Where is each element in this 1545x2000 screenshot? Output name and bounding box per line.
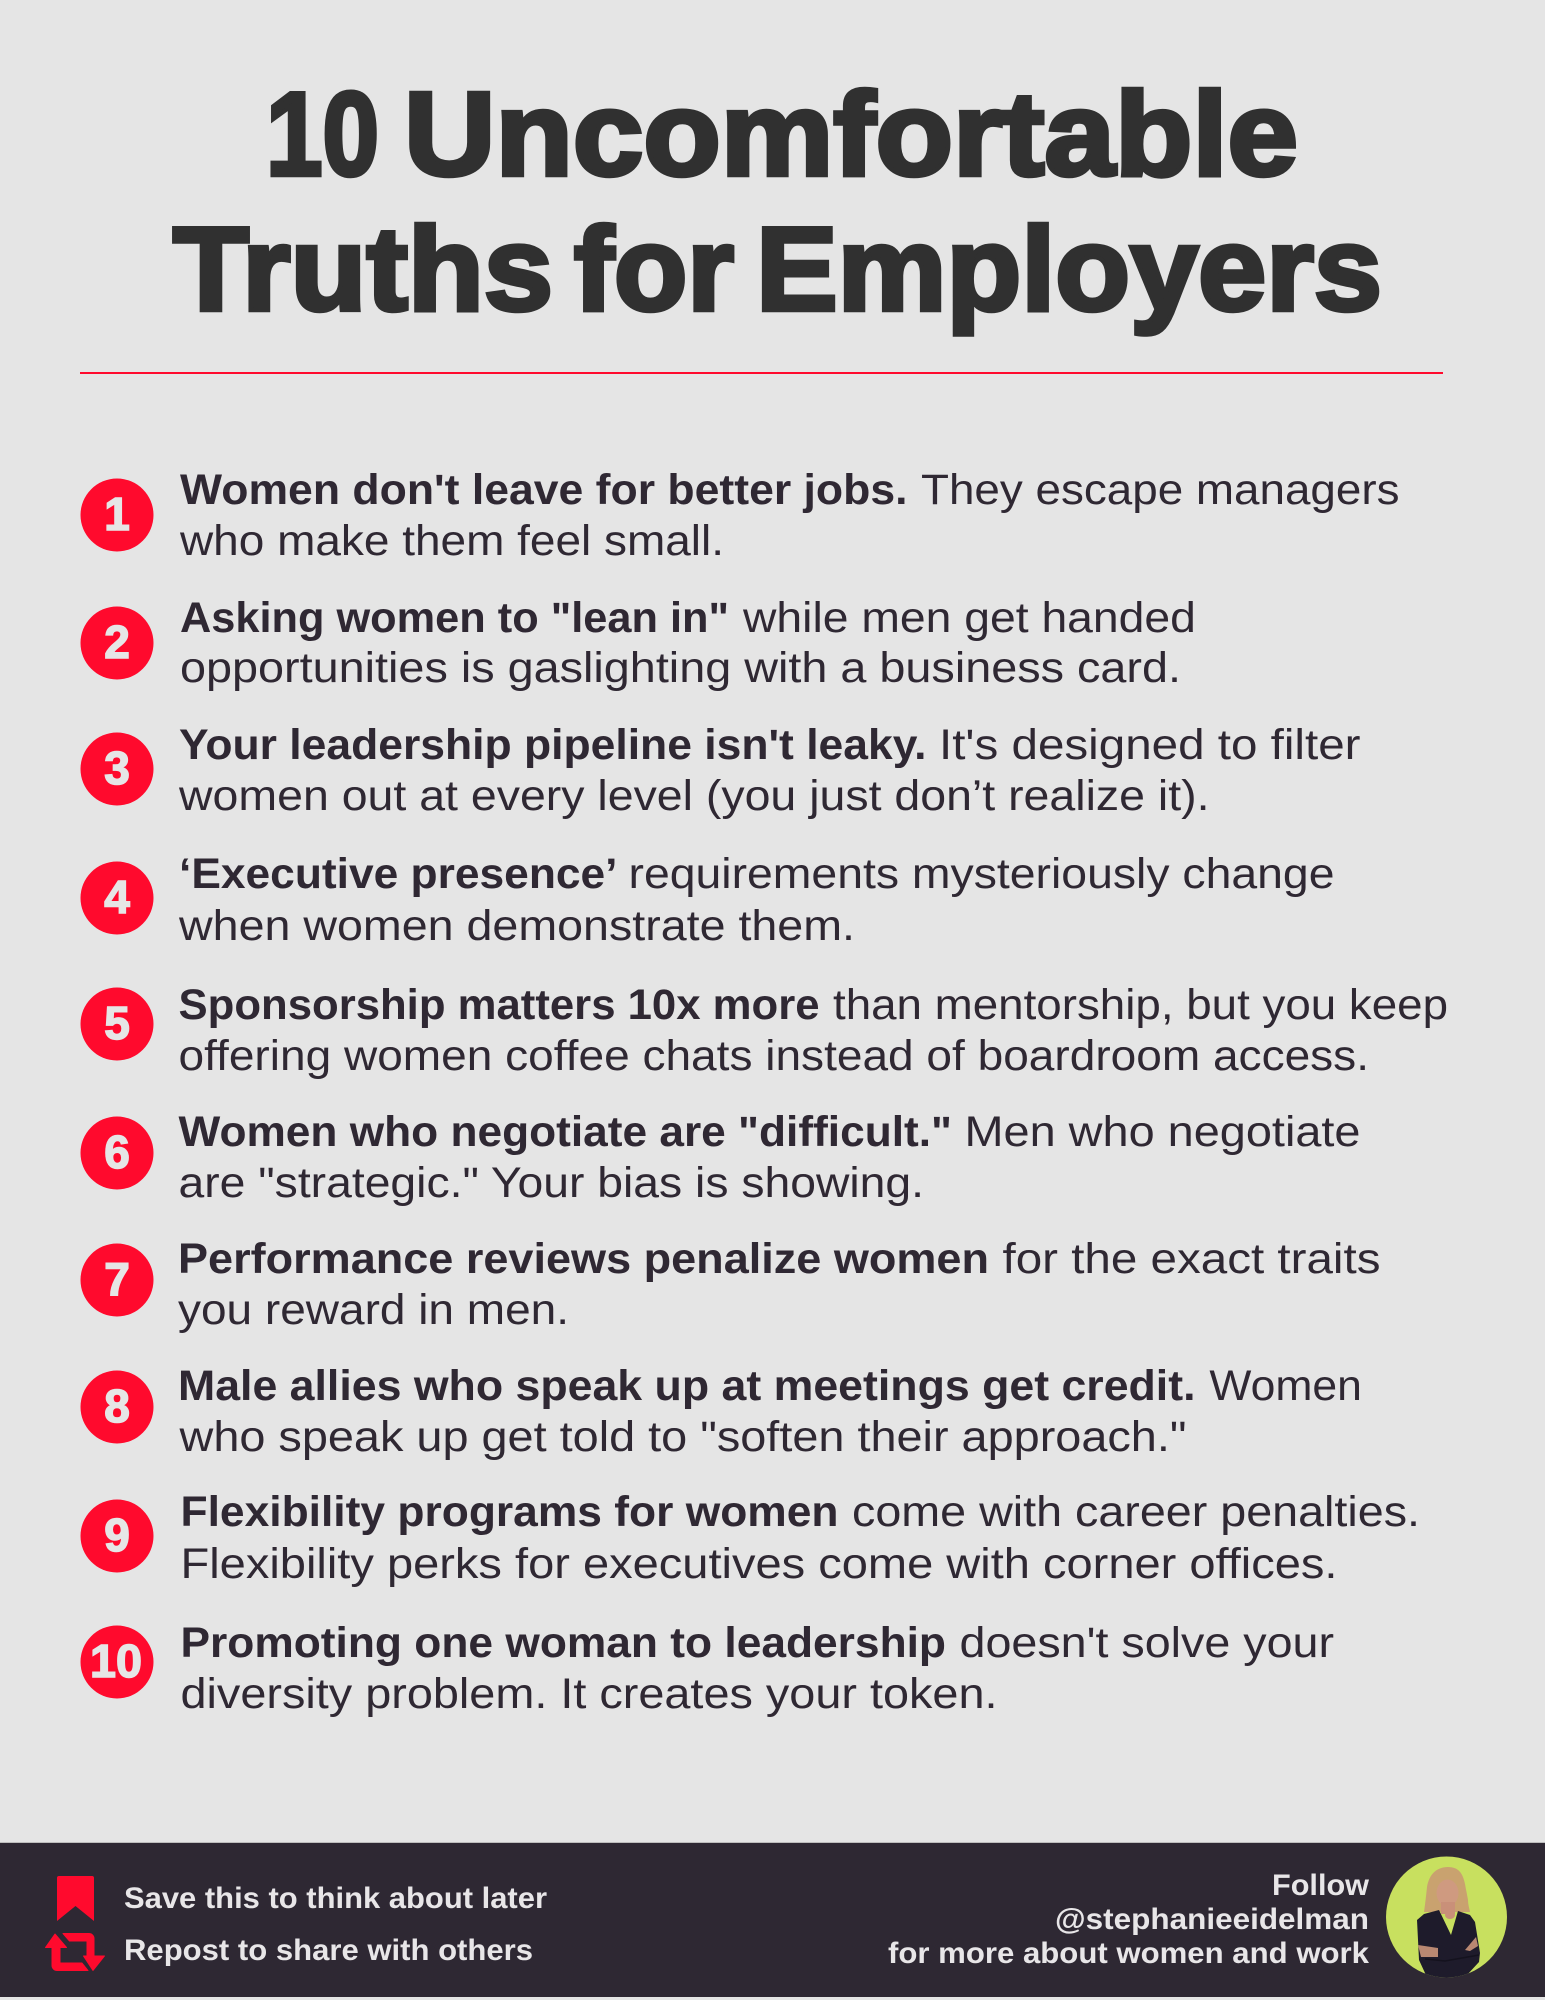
truth 4 <box>80 850 1334 950</box>
truth 2: while men get handed <box>742 594 1196 642</box>
truth 9 <box>80 1488 1420 1588</box>
truth 8: Male allies who speak up at meetings get credit. <box>178 1362 1196 1410</box>
truths list <box>80 466 1448 1718</box>
follow text: Follow <box>1272 1869 1370 1902</box>
truth 10: 10 <box>90 1635 142 1687</box>
truth 7: for the exact traits <box>1002 1235 1380 1283</box>
truth 3: Your leadership pipeline isn't leaky. <box>179 721 926 769</box>
truth 10 <box>80 1619 1334 1718</box>
truth 8: who speak up get told to "soften their approach." <box>178 1413 1186 1461</box>
truth 3: It's designed to filter <box>939 721 1360 769</box>
title: Employers <box>756 203 1382 336</box>
save call to action: Save this to think about later <box>124 1882 547 1915</box>
repost call to action: Repost to share with others <box>124 1934 533 1967</box>
truth 1 <box>80 466 1400 565</box>
truth 4: requirements mysteriously change <box>628 850 1334 898</box>
truth 1: 1 <box>104 488 130 540</box>
title: Uncomfortable <box>404 68 1298 201</box>
truth 5 <box>80 981 1448 1080</box>
truth 2 <box>80 594 1196 692</box>
follow text: @stephanieeidelman <box>1055 1903 1369 1936</box>
title: Truths <box>173 203 553 336</box>
title <box>173 68 1382 336</box>
truth 8: 8 <box>104 1380 130 1432</box>
avatar: portrait on lime circle <box>1386 1856 1507 1980</box>
truth 10: diversity problem. It creates your token. <box>180 1670 998 1718</box>
icon: repost arrows <box>46 1934 104 1970</box>
truth 2: Asking women to "lean in" <box>180 594 729 642</box>
truth 1: They escape managers <box>921 466 1400 514</box>
truth 4: ‘Executive presence’ <box>179 850 618 898</box>
truth 6: Women who negotiate are "difficult." <box>178 1108 952 1156</box>
truth 1: who make them feel small. <box>179 517 724 565</box>
truth 8: Women <box>1209 1362 1362 1410</box>
truth 7 <box>80 1235 1380 1334</box>
truth 3: 3 <box>104 742 130 794</box>
truth 9: Flexibility perks for executives come with corner offices. <box>180 1540 1338 1588</box>
truth 10: Promoting one woman to leadership <box>180 1619 946 1667</box>
truth 5: than mentorship, but you keep <box>833 981 1448 1029</box>
title: 10 <box>266 68 379 201</box>
truth 5: offering women coffee chats instead of boardroom access. <box>178 1032 1369 1080</box>
truth 7: Performance reviews penalize women <box>178 1235 989 1283</box>
truth 6: 6 <box>104 1126 130 1178</box>
truth 9: come with career penalties. <box>852 1488 1420 1536</box>
title: for <box>574 203 734 336</box>
truth 2: opportunities is gaslighting with a business card. <box>180 644 1181 692</box>
truth 6: Men who negotiate <box>964 1108 1360 1156</box>
truth 4: 4 <box>104 871 130 923</box>
truth 4: when women demonstrate them. <box>178 902 855 950</box>
truth 10: doesn't solve your <box>960 1619 1334 1667</box>
footer band <box>0 1842 1545 1997</box>
truth 5: Sponsorship matters 10x more <box>178 981 820 1029</box>
truth 1: Women don't leave for better jobs. <box>180 466 908 514</box>
truth 5: 5 <box>104 997 130 1049</box>
truth 3: women out at every level (you just don’t realize it). <box>178 772 1209 820</box>
truth 3 <box>80 721 1360 820</box>
truth 9: 9 <box>104 1509 130 1561</box>
truth 6: are "strategic." Your bias is showing. <box>178 1159 924 1207</box>
truth 9: Flexibility programs for women <box>180 1488 838 1536</box>
icon: bookmark <box>57 1876 94 1921</box>
follow text <box>888 1869 1370 1970</box>
truth 6 <box>80 1108 1360 1207</box>
truth 2: 2 <box>104 616 130 668</box>
follow text: for more about women and work <box>888 1937 1369 1970</box>
truth 7: 7 <box>104 1253 130 1305</box>
truth 8 <box>80 1362 1362 1461</box>
truth 7: you reward in men. <box>178 1286 569 1334</box>
